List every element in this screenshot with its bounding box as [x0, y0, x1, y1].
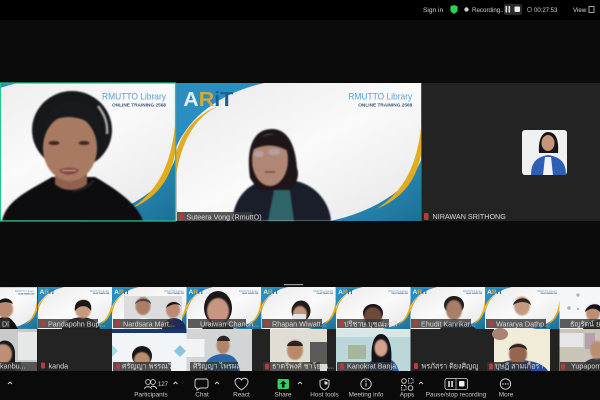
thumb: Uraiwan Chanch — [186, 287, 261, 329]
avatar: profile photo — [522, 130, 567, 175]
thumb: Phonphatsara — [410, 329, 494, 371]
thumb: Kanokrat: Kanokrat Banja... — [347, 362, 402, 370]
toolbar: react — [233, 378, 250, 398]
toolbar: participants — [134, 380, 178, 398]
person: woman with glasses — [232, 129, 331, 221]
thumb: Butsadi — [487, 328, 550, 371]
toolbar: meeting info — [349, 379, 384, 398]
thumb: Yupaporn — [550, 329, 600, 371]
thumb: kanda: kanda — [48, 362, 68, 370]
toolbar: share — [274, 379, 302, 398]
toolbar: chat — [195, 379, 219, 398]
thumb: Dl: Dl — [2, 320, 9, 328]
thumb: Pandapohn: Pandapohn Bup... — [48, 320, 106, 328]
bottom toolbar — [0, 371, 600, 400]
toolbar: meeting info: Meeting info — [349, 392, 384, 398]
thumb: Thatriphong: ธาตรีพงศ์ ชาโยเน... — [272, 362, 334, 370]
person: speaker — [2, 91, 143, 221]
thumbnail strip — [0, 287, 600, 371]
toolbar: participants: Participants — [134, 392, 168, 398]
panel drag handle — [284, 284, 303, 285]
thumb: Uraiwan Chanch: Uraiwan Chanch... — [200, 320, 259, 328]
thumbnails: top row — [0, 287, 600, 329]
toolbar: participants: 127 — [158, 382, 169, 388]
top status bar — [0, 0, 600, 20]
toolbar: share: Share — [274, 392, 292, 398]
recording controls — [504, 4, 522, 15]
name tag: Suteera Vong: Suteera Vong (RmuttO) — [186, 212, 262, 222]
thumb: kanbu — [0, 329, 37, 371]
thumb: Pricha — [336, 287, 410, 329]
thumb: Pricha: ปรีชาษ บุชณะฉลิ — [344, 320, 397, 328]
thumb: Wararya Dathp — [485, 287, 560, 329]
toolbar: pause and stop recording — [426, 378, 487, 398]
thumbnails: bottom row — [0, 328, 600, 371]
toolbar: more: More — [499, 392, 514, 398]
sign in link: Sign in — [423, 7, 443, 14]
thumb: Nardsara Mart: Nardsara Mart... — [123, 320, 175, 328]
toolbar: chat: Chat — [195, 392, 209, 398]
meeting timer: 00:27:53 — [534, 8, 558, 14]
thumb: Ehudit Kanrikar: Ehudit Kanrikar... — [421, 320, 476, 328]
toolbar: apps: Apps — [400, 392, 414, 398]
tile: Nirawan Srithong — [422, 83, 600, 221]
thumb: Ehudit Kanrikar — [410, 287, 485, 329]
thumb: Pandapohn — [38, 287, 112, 329]
toolbar: pause and stop recording: Pause/stop recording — [426, 392, 487, 398]
thumb: Butsadi: บุษฎี สามเกื้อรา — [495, 360, 543, 370]
thumb: kanda — [38, 329, 112, 371]
view button: View — [573, 7, 587, 14]
thumb: Phonphatsara: พรภัสรา ติยงศิญญู — [422, 362, 478, 370]
view button — [573, 6, 594, 14]
icon: security shield — [450, 5, 458, 14]
thumb: Dl — [0, 287, 37, 329]
thumb: Rhapan Wiwatt — [261, 287, 336, 329]
toolbar: more — [499, 379, 514, 398]
thumb: Siriyanya — [186, 329, 252, 371]
left chevron — [8, 382, 12, 384]
thumb: Wararya Dathp: Wararya Dathp... — [496, 320, 550, 328]
name tag: Nirawan Srithong: NIRAWAN SRITHONG — [432, 212, 506, 221]
thumb: Nardsara Mart — [112, 287, 186, 329]
toolbar: host tools — [310, 379, 339, 398]
thumb: Kanokrat — [336, 329, 410, 371]
active speaker border — [0, 83, 176, 221]
thumb: kanbu: kanbu... — [0, 362, 26, 370]
toolbar: apps — [400, 379, 423, 398]
thumb: Thai name right — [560, 287, 600, 329]
recording status: Recording... — [472, 7, 506, 14]
meeting timer — [527, 7, 558, 14]
thumb: Rhapan Wiwatt: Rhapan Wiwatt... — [272, 320, 327, 328]
thumb: Thatriphong — [252, 329, 336, 371]
toolbar: react: React — [233, 392, 250, 398]
toolbar: host tools: Host tools — [310, 392, 339, 398]
thumb: Saranya: ศรัญญา พรรณวิ... — [122, 362, 178, 370]
tile: speaker with headset — [0, 83, 176, 221]
thumb: Saranya — [112, 329, 186, 371]
thumb: Siriyanya: ศิริญญา ไพรผล่ว — [193, 362, 245, 370]
tile: Suteera Vong — [176, 83, 421, 222]
